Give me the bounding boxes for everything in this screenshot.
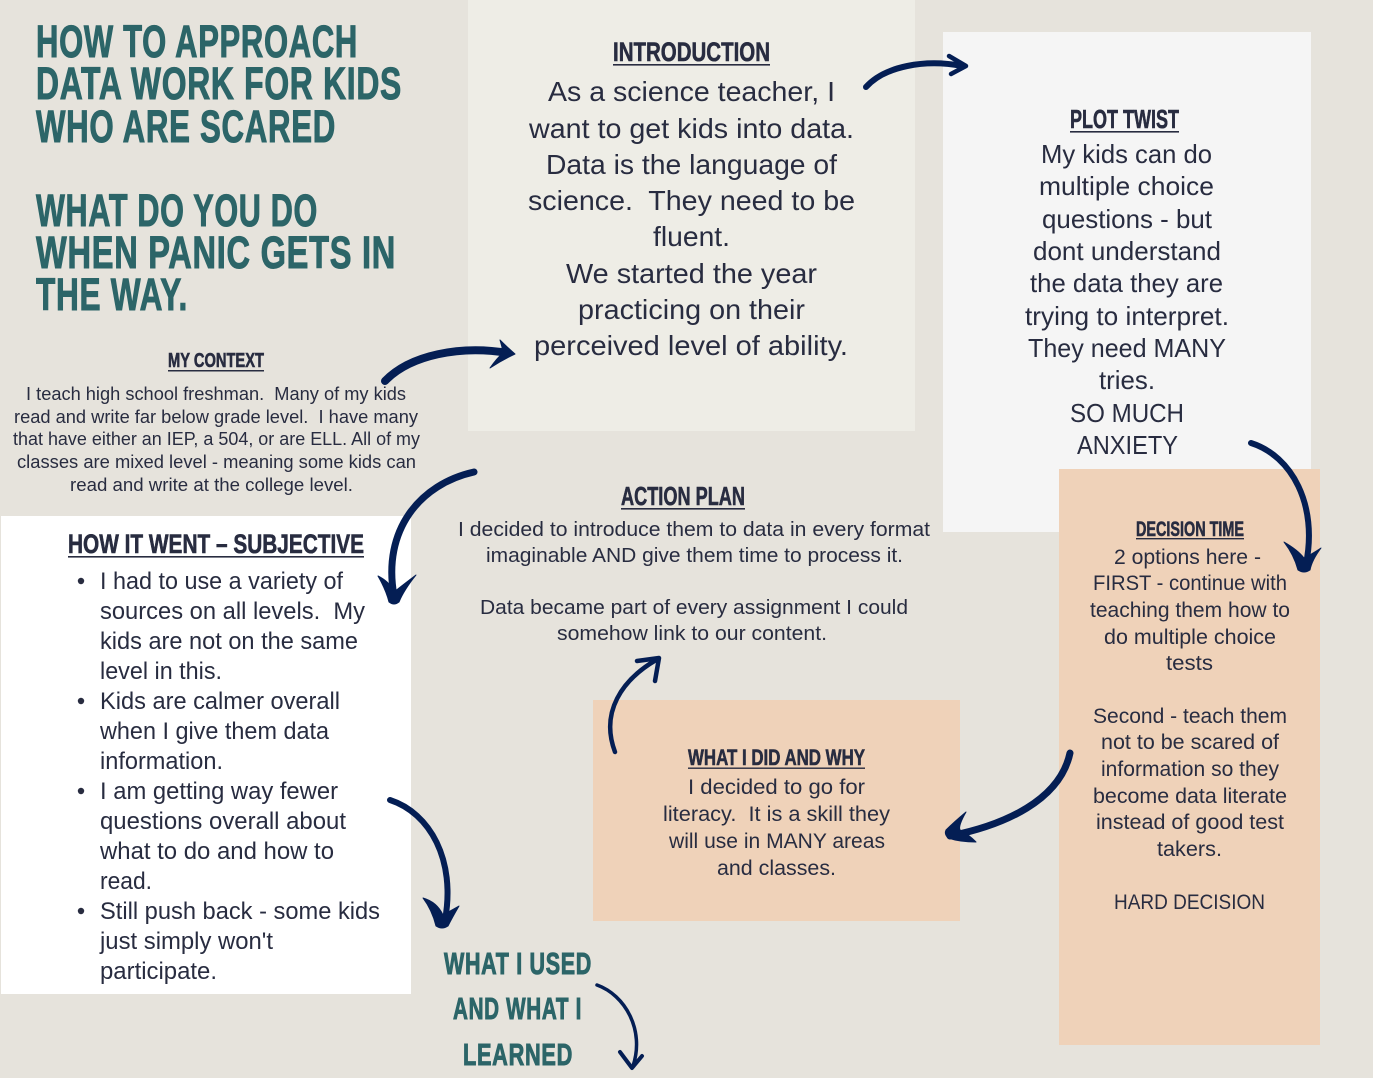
text: my context body [13,384,420,495]
text: decision time body [1090,545,1290,914]
title [36,16,402,320]
list: how it went bullets: Still push back - some kids [100,898,380,925]
panel: what i did and why [593,700,960,921]
heading: how it went subjective: HOW IT WENT – SUBJECTIVE [68,529,364,559]
heading: action plan: ACTION PLAN [621,481,745,511]
text: plot twist body: ANXIETY [1077,430,1178,460]
heading: what i used and what i learned [444,946,592,1072]
text: plot twist body: trying to interpret. [1025,301,1229,331]
text: decision time body: instead of good test [1096,810,1284,834]
heading: what i did and why: WHAT I DID AND WHY [688,745,865,770]
text: what i did and why body [663,775,890,880]
panel: action plan [458,481,930,645]
text: introduction body: want to get kids into data. [528,113,854,144]
text: my context body: I teach high school freshman. Many of my kids [26,384,406,404]
heading: plot twist [1070,104,1179,134]
list: how it went bullets: read. [100,868,152,895]
panel: introduction [468,0,915,431]
text: plot twist body: the data they are [1030,268,1223,298]
list: how it went bullets: kids are not on the same [100,628,358,655]
text: introduction body: fluent. [653,221,730,252]
text: decision time body: information so they [1101,757,1279,781]
title: DATA WORK FOR KIDS [36,58,402,109]
heading: my context: MY CONTEXT [168,350,264,372]
list: how it went bullets: questions overall about [100,808,346,835]
text: plot twist body: They need MANY [1028,333,1226,363]
text: plot twist body: SO MUCH [1070,398,1184,428]
text: plot twist body: multiple choice [1039,171,1214,201]
title: WHEN PANIC GETS IN [36,227,396,278]
title: THE WAY. [36,269,188,320]
text: action plan body: imaginable AND give them time to process it. [486,544,903,567]
text: action plan body [458,518,930,645]
arrow: what i did to action plan [610,658,659,752]
text: decision time body: teaching them how to [1090,598,1290,622]
list: how it went bullets: when I give them data [99,718,330,745]
arrow: introduction to plot twist [866,56,966,87]
text: my context body: read and write at the college level. [70,475,353,495]
arrow: plot twist to decision time [1251,443,1321,572]
text: decision time body: FIRST - continue with [1093,571,1287,595]
text: introduction body: practicing on their [578,294,805,325]
text: my context body: classes are mixed level - meaning some kids can [17,452,416,472]
text: plot twist body: dont understand [1033,236,1221,266]
title: HOW TO APPROACH [36,16,358,67]
text: introduction body: As a science teacher, I [548,76,835,107]
text: decision time body: tests [1166,651,1213,675]
text: decision time body: not to be scared of [1101,730,1279,754]
text: plot twist body: My kids can do [1041,139,1212,169]
arrow: how it went to what i used [390,800,459,928]
list: how it went bullets: information. [100,748,223,775]
text: plot twist body: questions - but [1042,204,1213,234]
text: introduction body: perceived level of ability. [534,330,848,361]
text: action plan body: I decided to introduce them to data in every format [458,518,930,541]
text: decision time body: 2 options here - [1114,545,1261,569]
text: decision time body: HARD DECISION [1114,890,1265,914]
list: how it went bullets: I am getting way fewer [100,778,338,805]
arrow: my context to introduction [385,340,515,381]
heading: action plan [621,481,745,511]
text: action plan body: somehow link to our content. [557,622,827,645]
list: how it went bullets: Kids are calmer overall [100,688,340,715]
list: how it went bullets [78,568,380,985]
list: how it went bullets: sources on all levels. My [100,598,365,625]
list: how it went bullets: participate. [100,958,217,985]
text: decision time body: takers. [1157,837,1222,861]
panel: how it went subjective [1,516,411,994]
arrow: context to how it went [378,472,474,604]
text: plot twist body: tries. [1099,365,1155,395]
panel: my context [13,350,420,495]
text: action plan body: Data became part of every assignment I could [480,596,908,619]
text: my context body: read and write far below grade level. I have many [14,407,418,427]
text: decision time body: become data literate [1093,784,1287,808]
text: my context body: that have either an IEP, a 504, or are ELL. All of my [13,429,420,449]
text: plot twist body [1025,139,1229,460]
text: introduction body [528,76,855,361]
text: what i did and why body: literacy. It is a skill they [663,802,890,826]
heading: plot twist: PLOT TWIST [1070,104,1179,134]
list: how it went bullets: what to do and how to [99,838,334,865]
text: what i did and why body: I decided to go for [688,775,865,799]
panel: plot twist [943,32,1311,532]
heading: what i used and what i learned: AND WHAT I [453,991,582,1026]
list: how it went bullets: I had to use a variety of [100,568,343,595]
text: what i did and why body: and classes. [717,856,836,880]
heading: decision time [1136,518,1244,541]
text: what i did and why body: will use in MANY areas [668,829,885,853]
text: introduction body: Data is the language of [546,149,837,180]
panel: decision time [1059,469,1320,1045]
heading: introduction: INTRODUCTION [613,37,770,67]
heading: what i used and what i learned: LEARNED [463,1037,573,1072]
title: WHO ARE SCARED [36,101,336,152]
text: decision time body: do multiple choice [1104,625,1276,649]
heading: what i used and what i learned: WHAT I USED [444,946,592,981]
title: WHAT DO YOU DO [36,185,318,236]
text: decision time body: Second - teach them [1093,704,1287,728]
text: introduction body: science. They need to be [528,185,855,216]
list: how it went bullets: just simply won't [99,928,273,955]
heading: decision time: DECISION TIME [1136,518,1244,541]
list: how it went bullets: level in this. [100,658,222,685]
arrow: decision time to what i did [945,753,1070,842]
text: introduction body: We started the year [566,258,817,289]
arrow: what i used to results [597,985,642,1068]
